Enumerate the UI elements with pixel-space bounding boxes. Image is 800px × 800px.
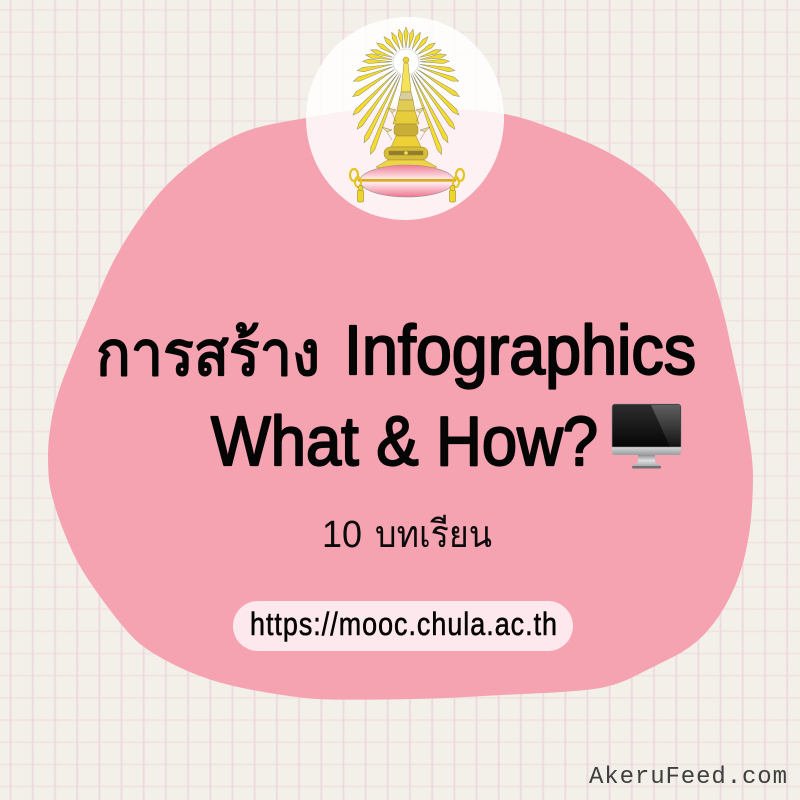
- URL text: https://mooc.chula.ac.th: [250, 606, 558, 642]
- emblem halo: [393, 49, 419, 75]
- monitor chin: [612, 446, 681, 455]
- emblem pillow band: [358, 179, 456, 182]
- URL pill: [233, 601, 573, 651]
- title Thai text: การสร้าง: [96, 320, 320, 389]
- pink blob background: [48, 107, 753, 700]
- monitor stand: [632, 455, 661, 466]
- emblem pagoda: [376, 57, 437, 169]
- monitor screen: [612, 404, 681, 447]
- icon: university emblem: [350, 27, 464, 202]
- title Latin text: Infographics: [344, 311, 696, 389]
- title line 1: [96, 311, 696, 389]
- monitor foot: [632, 466, 661, 468]
- emblem right tassel: [450, 169, 464, 202]
- white logo circle: [306, 17, 504, 220]
- title line 2: What & How?: [211, 402, 598, 480]
- monitor glare: [651, 405, 680, 447]
- emblem left tassel: [350, 169, 364, 202]
- lesson number: 10: [322, 514, 362, 556]
- watermark: AkeruFeed.com: [589, 764, 787, 791]
- subtitle: lesson count: [322, 514, 492, 556]
- emblem pillow: [360, 165, 454, 197]
- emblem rays: [351, 27, 461, 155]
- lesson label: บทเรียน: [375, 514, 492, 556]
- icon: desktop monitor: [612, 404, 681, 468]
- pill background: [233, 601, 573, 651]
